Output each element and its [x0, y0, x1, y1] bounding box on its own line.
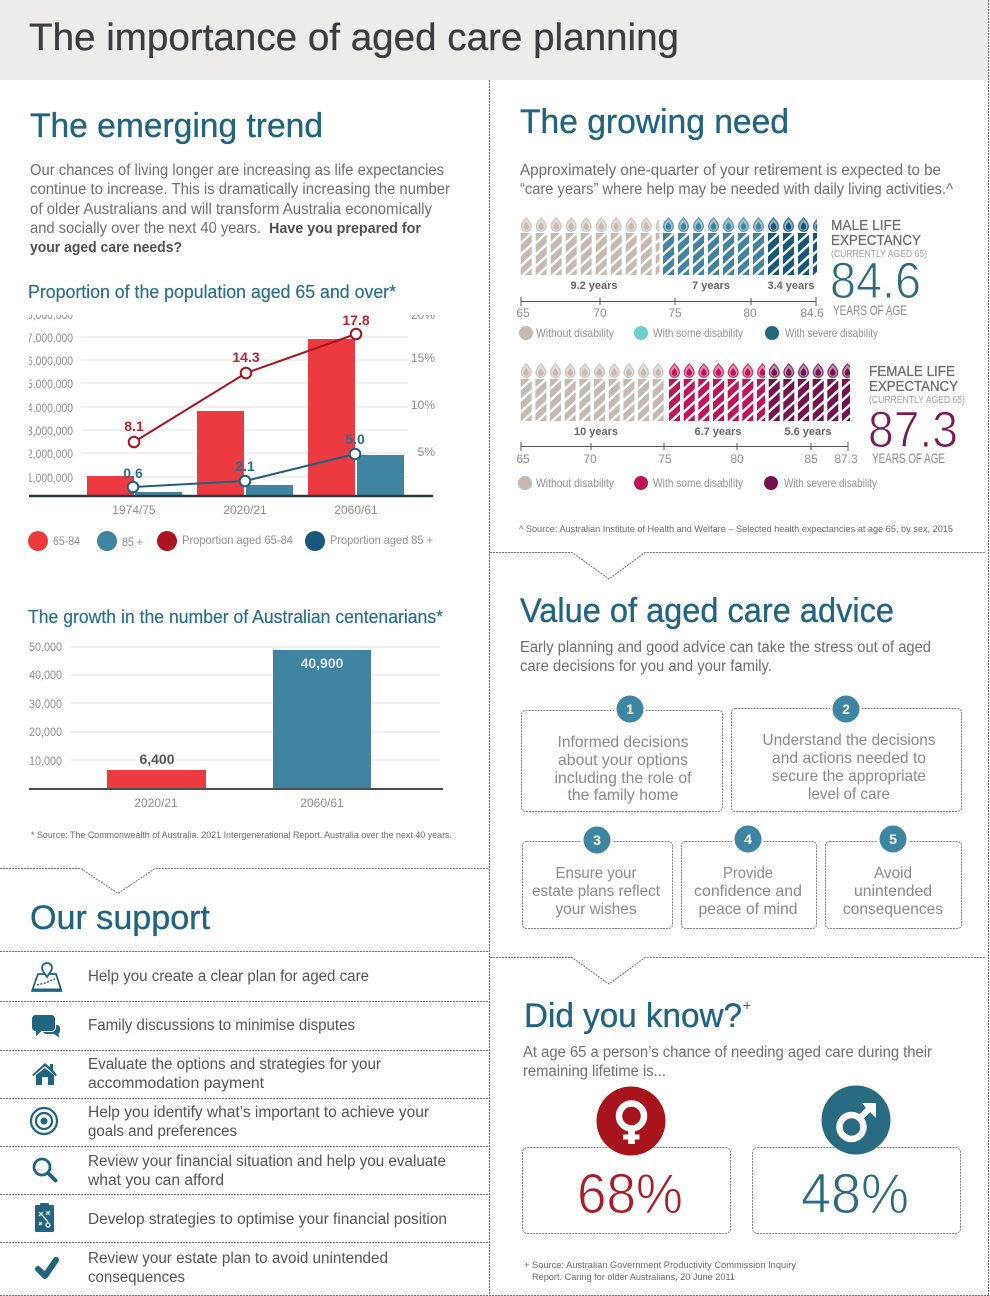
row text: financial situation [87, 1153, 446, 1189]
female legend [518, 476, 877, 490]
male legend [519, 326, 878, 340]
female timeline: 85 [804, 452, 818, 466]
female life expectancy figure: EXPECTANCY [869, 379, 958, 395]
stat: male 48%: 48% [801, 1162, 909, 1226]
row text: financial situation: Review your financial situation and help you evaluate [88, 1153, 446, 1170]
row text: optimise position: Develop strategies to optimise your financial position [88, 1211, 447, 1228]
advice box 1: 1 [626, 701, 634, 717]
chart: population bars and proportion lines: 6,000,000 [27, 354, 73, 368]
advice box 5: consequences [843, 901, 943, 918]
intro text: value of advice [520, 639, 931, 675]
stat: male 48% [752, 1086, 960, 1234]
advice box 4: confidence and [694, 883, 802, 900]
advice box 1: the family home [568, 787, 679, 804]
row text: estate plan: Review your estate plan to avoid unintended [88, 1250, 388, 1267]
panel: the emerging trend [30, 107, 450, 256]
source note: productivity commission: + Source: Australian Government Productivity Commission Inquiry [524, 1260, 796, 1271]
icon: map with pin [32, 963, 62, 992]
bar chart: centenarians: 2060/61 [300, 796, 344, 810]
heading: the emerging trend: The emerging trend [30, 107, 323, 145]
chart: population bars and proportion lines: 2020/21 [223, 503, 267, 517]
advice box 5 [826, 823, 962, 928]
heading: our support: Our support [30, 899, 211, 937]
row text: identify what's important: Help you identify what’s important to achieve your [88, 1104, 429, 1121]
row text: estate plan: consequences [88, 1269, 185, 1286]
female life expectancy figure: YEARS OF AGE [872, 450, 945, 466]
chart: population bars and proportion lines: 8.1 [124, 418, 144, 434]
row text: family discussions: Family discussions to minimise disputes [88, 1017, 355, 1034]
intro text: growing need: “care years” where help may be needed with daily living activities.^ [520, 181, 954, 198]
icon: check mark [38, 1260, 56, 1276]
female timeline: 75 [658, 452, 672, 466]
female legend: With severe disability [784, 476, 877, 490]
advice box 1: including the role of [554, 770, 692, 787]
intro text: value of advice: care decisions for you and your family. [520, 658, 772, 675]
advice box 2: level of care [808, 786, 890, 803]
female timeline: 80 [730, 452, 744, 466]
advice box 1: Informed decisions [558, 734, 688, 751]
heading: did you know: + [743, 997, 751, 1013]
male legend: With severe disability [785, 326, 878, 340]
intro text: did you know [523, 1044, 932, 1080]
row text: evaluate options [88, 1056, 381, 1092]
female life expectancy figure [868, 364, 965, 466]
title banner: The importance of aged care planning [29, 17, 679, 59]
female timeline: 87.3 [834, 452, 858, 466]
intro text: continue to increase. This is dramatically increasing the number [30, 181, 450, 198]
stat: female 68%: 68% [577, 1162, 683, 1226]
female legend: With some disability [653, 476, 743, 490]
chart: population bars and proportion lines: 5% [418, 445, 435, 459]
icon: strategy clipboard [35, 1203, 54, 1232]
advice box 1: about your options [558, 752, 688, 769]
advice box 3: estate plans reflect [532, 883, 661, 900]
chart: population bars and proportion lines: 4,000,000 [27, 401, 73, 415]
advice box 3: Ensure your [556, 865, 637, 882]
male timeline: 65 [516, 306, 530, 320]
intro text: did you know: At age 65 a person’s chance of needing aged care during their [523, 1044, 932, 1061]
female timeline: 5.6 years [784, 426, 832, 438]
advice box 3: 3 [593, 832, 601, 848]
intro text: and socially over the next 40 years. [30, 220, 261, 237]
advice box 2: 2 [842, 701, 850, 717]
female life expectancy candles [520, 358, 856, 424]
row text: evaluate options: accommodation payment [88, 1075, 265, 1092]
advice box 4: peace of mind [698, 901, 798, 918]
heading: value of aged care advice: Value of aged care advice [520, 592, 894, 630]
intro text: your aged care needs? [30, 239, 182, 256]
stat: female 68% [522, 1086, 730, 1234]
bar chart: centenarians: 30,000 [29, 697, 62, 711]
chart: population bars and proportion lines: 15% [411, 351, 435, 365]
chart: population bars and proportion lines: 2,000,000 [27, 447, 73, 461]
icon: magnifying glass [34, 1159, 56, 1180]
panel: value of aged care advice [520, 592, 962, 928]
panel: the growing need [516, 103, 965, 535]
chart legend: Proportion aged 65-84 [182, 533, 293, 547]
advice box 5: Avoid [874, 865, 912, 882]
chart: population bars and proportion lines: 14.3 [232, 349, 260, 365]
bar chart: centenarians [29, 640, 443, 810]
chart: population bars and proportion lines: 0.6 [123, 465, 143, 481]
chart: population bars and proportion lines: 7,000,000 [27, 331, 73, 345]
intro text: growing need: Approximately one-quarter of your retirement is expected to be [520, 162, 941, 179]
panel: did you know [522, 997, 960, 1283]
row text: clear plan: Help you create a clear plan for aged care [88, 968, 369, 985]
female life expectancy figure: FEMALE LIFE [869, 364, 955, 380]
icon: speech bubbles [32, 1014, 60, 1038]
male life expectancy figure: (CURRENTLY AGED 65) [831, 249, 927, 260]
advice box 1 [522, 693, 722, 812]
male timeline [516, 280, 824, 320]
source note: life expectancy: ^ Source: Australian Institute of Health and Welfare – Selected health expectancies at age 65, by sex, 2015 [519, 524, 953, 535]
icon: house [32, 1063, 57, 1085]
female life expectancy figure: 87.3 [868, 401, 958, 458]
bar chart: centenarians: 40,000 [29, 668, 62, 682]
icon: target [31, 1108, 57, 1134]
title banner [0, 0, 990, 80]
chart: population bars and proportion lines: 8,000,000 [27, 308, 73, 322]
chart: population bars and proportion lines: 1974/75 [112, 503, 156, 517]
bar chart: centenarians: 40,900 [301, 655, 344, 671]
chart legend [28, 531, 433, 551]
chart legend: 65-84 [53, 534, 80, 548]
source note: productivity commission: Report. Caring for older Australians, 20 June 2011 [532, 1272, 735, 1283]
female life expectancy figure: (CURRENTLY AGED 65) [869, 395, 965, 406]
chart: population bars and proportion lines: 10% [411, 398, 435, 412]
heading: centenarians chart: The growth in the number of Australian centenarians* [28, 607, 443, 627]
heading: proportion chart: Proportion of the population aged 65 and over* [28, 282, 396, 302]
female timeline: 6.7 years [694, 426, 742, 438]
male life expectancy figure: EXPECTANCY [831, 233, 921, 249]
chart: population bars and proportion lines: 1,000,000 [27, 471, 73, 485]
male timeline: 7 years [692, 280, 730, 292]
row text: estate plan [88, 1250, 388, 1286]
chart: population bars and proportion lines: 2.1 [235, 458, 255, 474]
female timeline: 10 years [574, 426, 618, 438]
intro text: Our chances of living longer are increasing as life expectancies [30, 162, 444, 179]
intro text: growing need [520, 162, 954, 198]
chart: population bars and proportion lines: 3,000,000 [27, 424, 73, 438]
bar chart: centenarians: 50,000 [29, 640, 62, 654]
male life expectancy figure: YEARS OF AGE [833, 302, 907, 318]
intro text: of older Australians and will transform Australia economically [30, 201, 432, 218]
male life expectancy figure: 84.6 [830, 252, 921, 309]
advice box 4 [682, 823, 816, 928]
icon: female symbol [596, 1086, 666, 1156]
chart: population bars and proportion lines [27, 308, 435, 517]
chart: population bars and proportion lines: 5,000,000 [27, 377, 73, 391]
advice box 3: your wishes [556, 901, 636, 918]
intro text [30, 162, 450, 256]
chart: population bars and proportion lines: 2060/61 [334, 503, 378, 517]
icon: male symbol [822, 1086, 890, 1154]
advice box 2 [732, 693, 962, 812]
male life expectancy candles [520, 212, 826, 278]
intro text: did you know: remaining lifetime is... [523, 1063, 666, 1080]
source note: centenarians: * Source: The Commonwealth of Australia. 2021 Intergenerational Report. Australia over the next 40 years. [31, 830, 452, 841]
row text: identify what's important [88, 1104, 429, 1140]
advice box 2: and actions needed to [772, 750, 926, 767]
bar chart: centenarians: 2020/21 [134, 796, 178, 810]
male timeline: 80 [743, 306, 757, 320]
chart: population bars and proportion lines: 5.0 [345, 431, 365, 447]
male timeline: 84.6 [800, 306, 824, 320]
source note: productivity commission [524, 1260, 796, 1283]
male timeline: 70 [593, 306, 607, 320]
male legend: With some disability [653, 326, 743, 340]
intro text: Have you prepared for [269, 220, 421, 237]
advice box 3 [522, 824, 672, 928]
male life expectancy figure [830, 218, 927, 318]
bar chart: centenarians: 6,400 [139, 751, 175, 767]
male legend: Without disability [536, 326, 614, 340]
bar chart: centenarians: 10,000 [29, 754, 62, 768]
male timeline: 75 [668, 306, 682, 320]
female timeline: 70 [583, 452, 597, 466]
heading: did you know: Did you know? [524, 997, 742, 1035]
chart legend: Proportion aged 85 + [330, 533, 433, 547]
male timeline: 3.4 years [767, 280, 815, 292]
advice box 2: secure the appropriate [772, 768, 926, 785]
chart legend: 85 + [122, 535, 143, 549]
bar chart: centenarians: 20,000 [29, 725, 62, 739]
row text: financial situation: what you can afford [87, 1172, 224, 1189]
male life expectancy figure: MALE LIFE [831, 218, 901, 234]
advice box 2: Understand the decisions [762, 732, 936, 749]
advice box 4: 4 [744, 831, 752, 847]
intro text: value of advice: Early planning and good advice can take the stress out of aged [520, 639, 931, 656]
female timeline: 65 [516, 452, 530, 466]
chart: population bars and proportion lines: 20% [411, 308, 435, 322]
chart: population bars and proportion lines: 17.8 [342, 312, 370, 328]
row text: evaluate options: Evaluate the options and strategies for your [88, 1056, 381, 1073]
advice box 5: 5 [889, 831, 897, 847]
panel: proportion chart [27, 282, 435, 551]
panel: centenarians chart [28, 607, 452, 841]
advice box 4: Provide [723, 865, 773, 882]
female legend: Without disability [536, 476, 614, 490]
female timeline [516, 426, 858, 466]
row text: identify what's important: goals and preferences [88, 1123, 237, 1140]
panel: our support [0, 899, 990, 1296]
male timeline: 9.2 years [570, 280, 618, 292]
advice box 5: unintended [854, 883, 932, 900]
heading: the growing need: The growing need [520, 103, 789, 141]
